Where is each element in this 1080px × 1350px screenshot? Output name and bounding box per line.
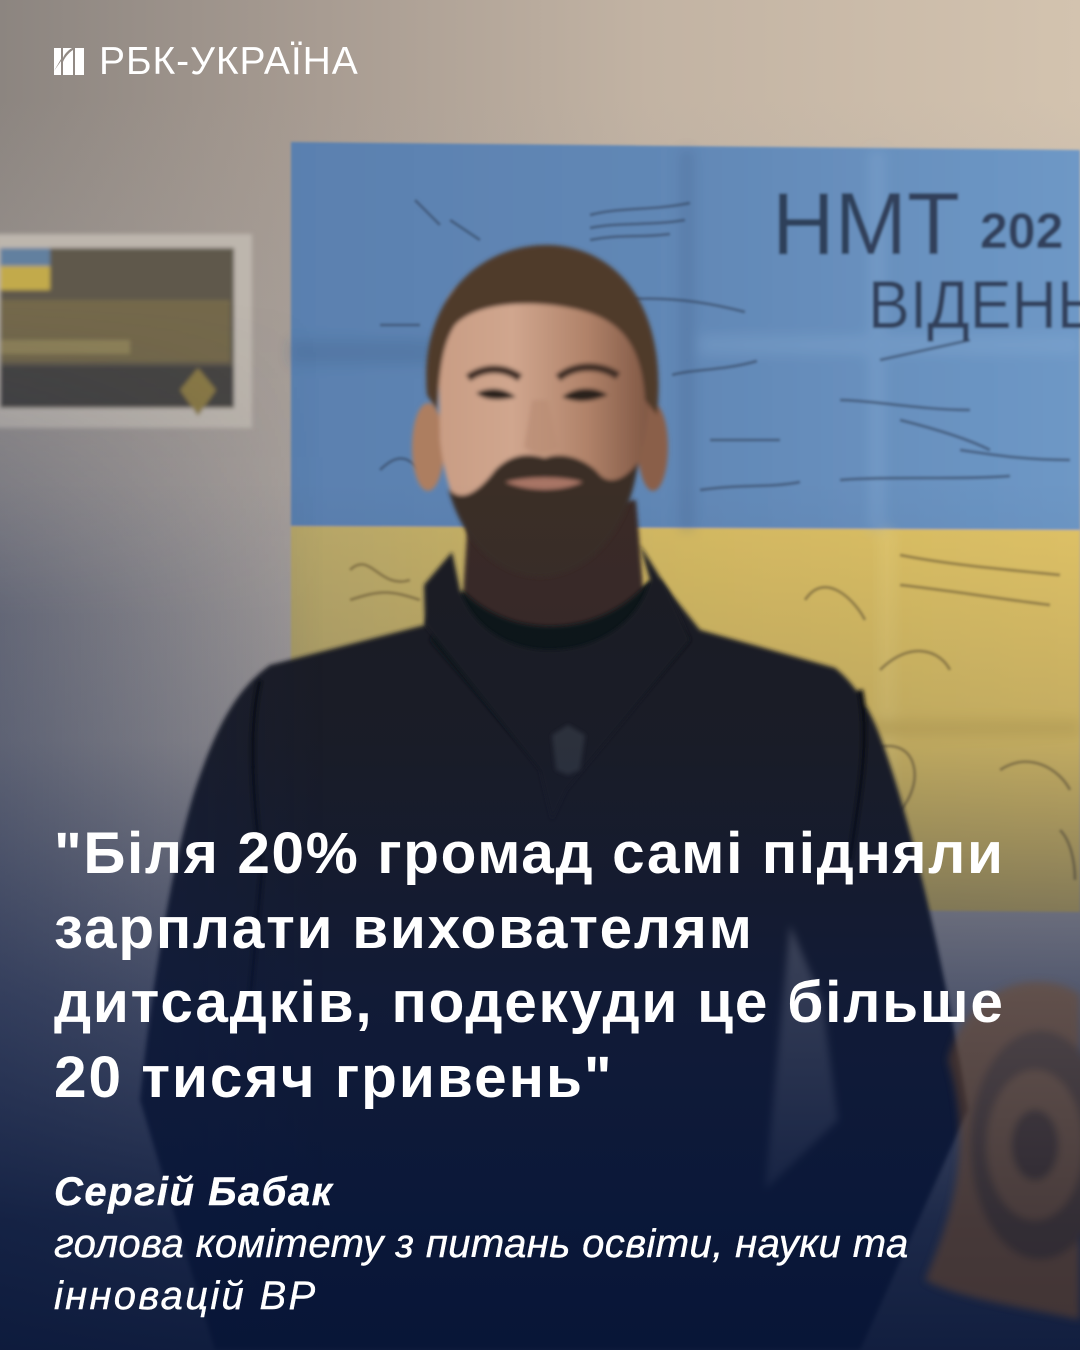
quote headline: зарплати вихователям (54, 896, 754, 961)
logo wordmark: РБК-УКРАЇНА (99, 40, 359, 83)
attribution: Сергій Бабак (54, 1170, 333, 1214)
icon: RBC logo mark (54, 48, 84, 75)
logo: РБК-Україна (54, 40, 359, 83)
jacket collar (424, 545, 690, 820)
quote headline: 20 тисяч гривень" (54, 1045, 614, 1110)
quote headline: дитсадків, подекуди це більше (54, 970, 1005, 1035)
attribution (54, 1170, 909, 1318)
body (140, 580, 968, 1350)
attribution: голова комітету з питань освіти, науки та (54, 1222, 909, 1266)
side vignette and bottom gradient overlay (0, 344, 281, 1206)
flag (290, 142, 1080, 912)
attribution: інновацій ВР (54, 1274, 317, 1318)
flag inscriptions: 202 (980, 203, 1063, 259)
head (412, 245, 668, 577)
gap between arm and torso (765, 925, 838, 1190)
flag inscriptions (772, 174, 1080, 343)
trident on shirt (552, 725, 585, 775)
decorative plate (925, 982, 1080, 1320)
quote headline: "Біля 20% громад самі підняли (54, 821, 1005, 886)
picture frame (0, 234, 252, 428)
quote headline (54, 821, 1005, 1110)
flag inscriptions: НМТ (772, 174, 960, 273)
neck (462, 500, 644, 631)
T-shirt collar (430, 580, 690, 790)
